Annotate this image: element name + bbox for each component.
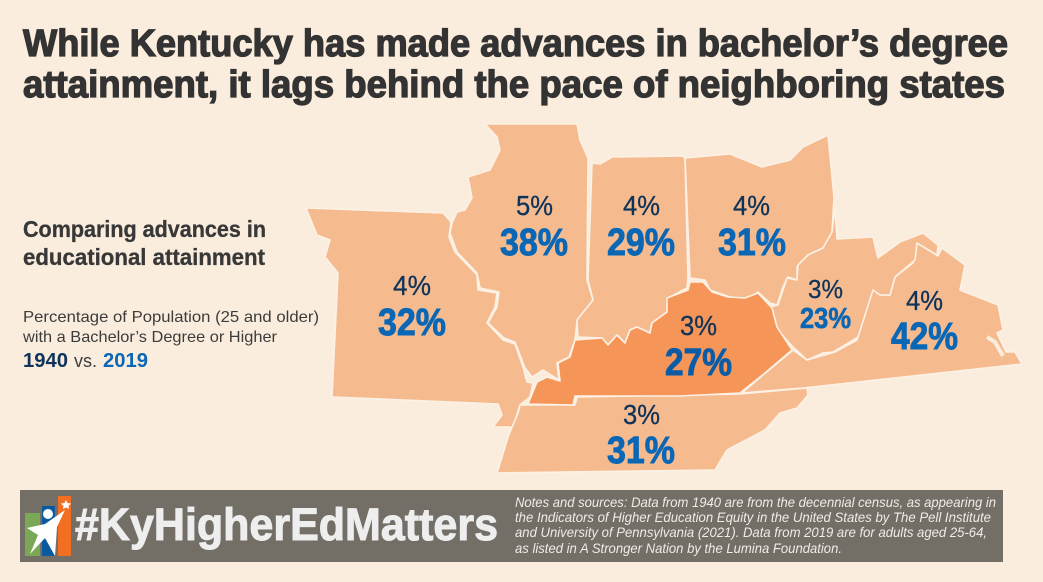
values: Ohio: 4% (733, 190, 770, 221)
values: West Virginia: 23% (800, 303, 851, 335)
values: Kentucky: 3% (680, 310, 717, 341)
legend text: 2019 (103, 350, 148, 372)
state: Kentucky (highlighted) (528, 282, 792, 405)
legend text: Percentage of Population (25 and older) (23, 309, 319, 326)
legend text: vs. (74, 351, 97, 371)
values: Tennessee (607, 399, 675, 472)
state: Missouri (306, 208, 533, 427)
values: Missouri: 4% (393, 270, 431, 301)
values: Illinois: 5% (516, 190, 553, 221)
values: West Virginia (800, 274, 851, 335)
values: Illinois (500, 190, 568, 264)
state: Indiana (577, 156, 688, 345)
legend text: with a Bachelor’s Degree or Higher (22, 329, 278, 346)
notes and sources: Notes and sources: Data from 1940 are from the decennial census, as appearing in (515, 494, 996, 510)
title (23, 23, 1008, 106)
values: Tennessee: 31% (607, 430, 675, 472)
values: Virginia: 4% (906, 285, 943, 316)
state: Ohio (685, 135, 834, 305)
state: Virginia (742, 243, 1022, 393)
values: Ohio (718, 190, 786, 264)
values: Indiana (607, 190, 675, 264)
subheading: comparing advances: educational attainment (23, 244, 265, 270)
values: Illinois: 38% (500, 222, 568, 264)
values: Kentucky: 27% (665, 342, 732, 384)
footer banner (20, 490, 1003, 562)
notes and sources: and University of Pennsylvania (2021). Data from 2019 are for adults aged 25-64, (515, 524, 987, 540)
state: West Virginia (770, 208, 938, 360)
values: Virginia: 42% (891, 316, 958, 358)
map of Kentucky and neighboring states (306, 124, 1022, 473)
notes and sources (515, 494, 996, 556)
notes and sources: the Indicators of Higher Education Equity in the United States by The Pell Institute (515, 509, 991, 525)
state: Tennessee (497, 388, 808, 473)
legend text (22, 309, 319, 372)
state: Illinois (450, 124, 593, 380)
legend text: 1940 (23, 350, 68, 372)
notes and sources: as listed in A Stronger Nation by the Lumina Foundation. (515, 540, 842, 556)
values: Ohio: 31% (718, 222, 786, 264)
values: Indiana: 29% (607, 222, 675, 264)
values: Indiana: 4% (623, 190, 660, 221)
values: West Virginia: 3% (808, 274, 843, 304)
hashtag: #KyHigherEdMatters (75, 499, 498, 550)
values: Tennessee: 3% (623, 399, 660, 430)
title: While Kentucky has made advances in bachelor’s degree (23, 23, 1008, 65)
values: Kentucky (665, 310, 732, 384)
subheading: comparing advances: Comparing advances in (23, 216, 266, 242)
values: Missouri (378, 270, 446, 344)
values: Missouri: 32% (378, 302, 446, 344)
values: Virginia (891, 285, 958, 358)
subheading: comparing advances (23, 216, 266, 270)
river notch in Virginia (987, 337, 1003, 356)
title: attainment, it lags behind the pace of neighboring states (23, 64, 1005, 106)
icon: logo (25, 496, 71, 556)
